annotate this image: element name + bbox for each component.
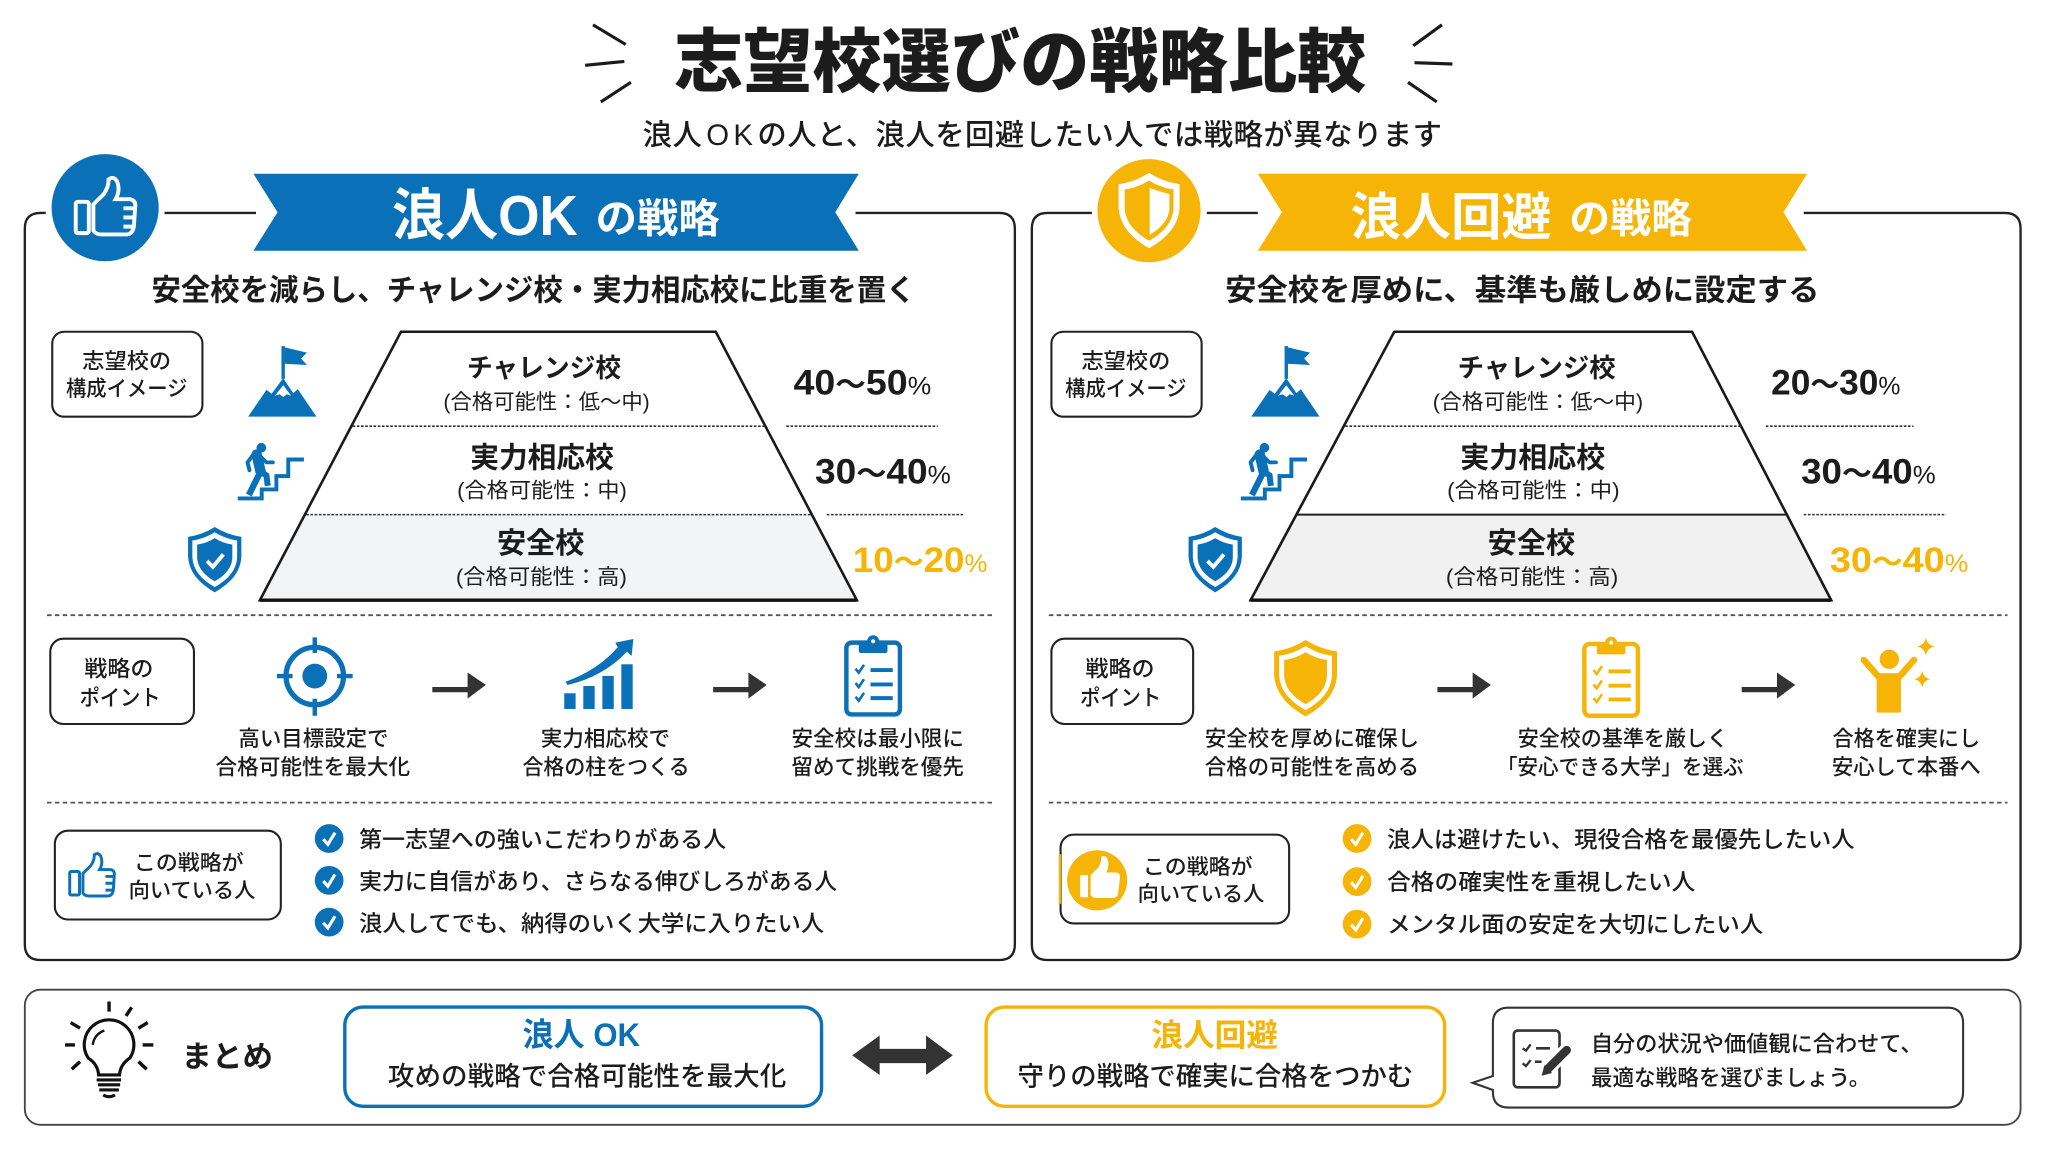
- step: checklist: 「安心できる大学」を選ぶ: [1497, 755, 1744, 780]
- checklist: suited people: 実力に自信があり、さらなる伸びしろがある人: [359, 868, 837, 894]
- arrow: [1742, 673, 1795, 699]
- step: cheering person: [1832, 637, 1981, 780]
- tier: safety: 安全校: [497, 528, 585, 560]
- step: shield: 合格の可能性を高める: [1205, 755, 1419, 780]
- percent: safety share: 10〜20%: [853, 541, 987, 580]
- label: この戦略が向いている人: [1060, 835, 1289, 923]
- card: 浪人回避: 守りの戦略で確実に合格をつかむ: [1017, 1061, 1413, 1091]
- advice text: 自分の状況や価値観に合わせて、: [1591, 1031, 1923, 1056]
- step: checklist: [792, 635, 964, 780]
- step: target: 高い目標設定で: [238, 726, 389, 751]
- tier: match: (合格可能性：中): [1447, 480, 1620, 503]
- tier: safety: [456, 528, 627, 589]
- step: checklist: 安全校は最小限に: [792, 726, 964, 751]
- step: checklist: 安全校の基準を厳しく: [1518, 726, 1728, 751]
- step: cheering person: 安心して本番へ: [1832, 755, 1981, 780]
- percent: match share: 30〜40%: [815, 452, 951, 491]
- tier: challenge: チャレンジ校: [467, 353, 621, 383]
- summary frame: [25, 990, 2021, 1125]
- banner: 浪人OKの戦略: の戦略: [596, 195, 720, 241]
- step: growth chart: 実力相応校で: [541, 726, 670, 751]
- step: checklist: 留めて挑戦を優先: [792, 755, 964, 780]
- heading: strategy summary: 安全校を厚めに、基準も厳しめに設定する: [1225, 274, 1819, 307]
- step: cheering person: 合格を確実にし: [1832, 726, 1980, 751]
- label: この戦略が向いている人: 向いている人: [1138, 883, 1264, 906]
- icon: mountain flag: [248, 346, 316, 417]
- panel: 浪人OK strategy: [25, 154, 1015, 960]
- checklist: suited people: 合格の確実性を重視したい人: [1387, 869, 1695, 895]
- icon: thumbs up badge: [52, 154, 159, 261]
- label: 戦略のポイント: ポイント: [1080, 685, 1161, 710]
- title rays right: [1408, 25, 1452, 102]
- arrow: [713, 673, 767, 699]
- tier: match: (合格可能性：中): [457, 480, 627, 503]
- arrow: [432, 673, 486, 699]
- subtitle: 浪人OKの人と、浪人を回避したい人では戦略が異なります: [643, 119, 1442, 152]
- icon: safety shield: [1189, 527, 1242, 592]
- card: 浪人回避: [986, 1007, 1445, 1106]
- percent: safety share: 30〜40%: [1830, 541, 1968, 580]
- icon: checklist and pencil: [1514, 1031, 1567, 1087]
- step: checklist: [1497, 637, 1744, 780]
- card: 浪人OK: 浪人 OK: [522, 1016, 640, 1053]
- tier: match: 実力相応校: [470, 443, 614, 475]
- icon: stairs climber: [1241, 443, 1307, 498]
- banner: 浪人OKの戦略: [253, 174, 859, 251]
- arrow: [1437, 673, 1491, 699]
- checklist: suited people: 第一志望への強いこだわりがある人: [359, 827, 726, 853]
- label: まとめ: まとめ: [182, 1041, 273, 1074]
- label: この戦略が向いている人: この戦略が: [134, 852, 244, 875]
- tier: safety: (合格可能性：高): [456, 566, 627, 589]
- banner: 浪人回避の戦略: の戦略: [1569, 195, 1693, 241]
- tier: safety: 安全校: [1488, 528, 1575, 560]
- banner: 浪人回避の戦略: [1258, 174, 1807, 251]
- tier: safety: [1446, 528, 1618, 589]
- tier: match: 実力相応校: [1460, 443, 1606, 475]
- pyramid chart: [1251, 332, 1831, 600]
- tier: challenge: (合格可能性：低〜中): [443, 391, 650, 414]
- tier: challenge: [1433, 353, 1643, 414]
- heading: strategy summary: 安全校を減らし、チャレンジ校・実力相応校に比重を置く: [152, 274, 916, 307]
- label: 戦略のポイント: [1051, 639, 1193, 724]
- advice text: [1591, 1031, 1923, 1090]
- tier: challenge: (合格可能性：低〜中): [1433, 391, 1643, 414]
- percent: challenge share: 40〜50%: [793, 363, 931, 402]
- checklist: suited people: [315, 824, 837, 936]
- label: 志望校の構成イメージ: 構成イメージ: [1065, 376, 1187, 401]
- checklist: suited people: [1343, 824, 1855, 938]
- label: 志望校の構成イメージ: 志望校の: [1081, 348, 1170, 373]
- card: 浪人回避: 浪人回避: [1151, 1018, 1278, 1053]
- icon: safety shield: [188, 527, 241, 592]
- step: shield: [1205, 640, 1419, 780]
- speech bubble: [1473, 1008, 1963, 1108]
- banner: 浪人回避の戦略: 浪人回避: [1351, 189, 1552, 246]
- checklist: suited people: メンタル面の安定を大切にしたい人: [1387, 912, 1763, 938]
- label: 戦略のポイント: 戦略の: [1085, 657, 1155, 682]
- icon: mountain flag: [1251, 346, 1320, 417]
- label: 戦略のポイント: 戦略の: [84, 657, 153, 682]
- checklist: suited people: 浪人は避けたい、現役合格を最優先したい人: [1387, 827, 1855, 853]
- step: growth chart: [522, 639, 690, 780]
- label: この戦略が向いている人: 向いている人: [129, 879, 255, 902]
- icon: light bulb: [65, 1002, 153, 1097]
- title: 志望校選びの戦略比較: [674, 23, 1366, 101]
- title rays left: [585, 25, 631, 102]
- icon: shield badge: [1097, 159, 1201, 262]
- icon: stairs climber: [238, 443, 304, 498]
- label: 志望校の構成イメージ: 構成イメージ: [66, 376, 187, 401]
- card: 浪人OK: 攻めの戦略で合格可能性を最大化: [388, 1061, 786, 1091]
- advice text: 最適な戦略を選びましょう。: [1591, 1065, 1870, 1090]
- tier: challenge: [443, 353, 650, 414]
- tier: safety: (合格可能性：高): [1446, 566, 1618, 589]
- panel: summary: [25, 990, 2021, 1125]
- panel frame: [25, 213, 1015, 960]
- panel: 浪人回避 strategy: [1032, 159, 2021, 960]
- pyramid chart: [260, 332, 857, 600]
- percent: challenge share: 20〜30%: [1771, 363, 1900, 402]
- label: この戦略が向いている人: この戦略が: [1143, 856, 1253, 879]
- tier: match: [1447, 443, 1620, 503]
- label: この戦略が向いている人: [55, 831, 281, 920]
- percent: match share: 30〜40%: [1801, 452, 1936, 491]
- banner: 浪人OKの戦略: 浪人OK: [392, 184, 578, 247]
- label: 志望校の構成イメージ: [52, 332, 202, 417]
- tier: match: [457, 443, 627, 503]
- card: 浪人OK: [345, 1007, 822, 1106]
- label: 戦略のポイント: [50, 639, 194, 724]
- checklist: suited people: 浪人してでも、納得のいく大学に入りたい人: [359, 910, 824, 936]
- double arrow: [852, 1035, 953, 1075]
- step: target: [216, 637, 410, 780]
- label: 戦略のポイント: ポイント: [80, 685, 161, 710]
- label: 志望校の構成イメージ: [1051, 332, 1202, 417]
- label: 志望校の構成イメージ: 志望校の: [82, 348, 171, 373]
- step: shield: 安全校を厚めに確保し: [1205, 726, 1419, 751]
- step: growth chart: 合格の柱をつくる: [522, 755, 690, 780]
- panel frame: [1032, 213, 2021, 960]
- tier: challenge: チャレンジ校: [1458, 353, 1616, 383]
- step: target: 合格可能性を最大化: [216, 755, 410, 780]
